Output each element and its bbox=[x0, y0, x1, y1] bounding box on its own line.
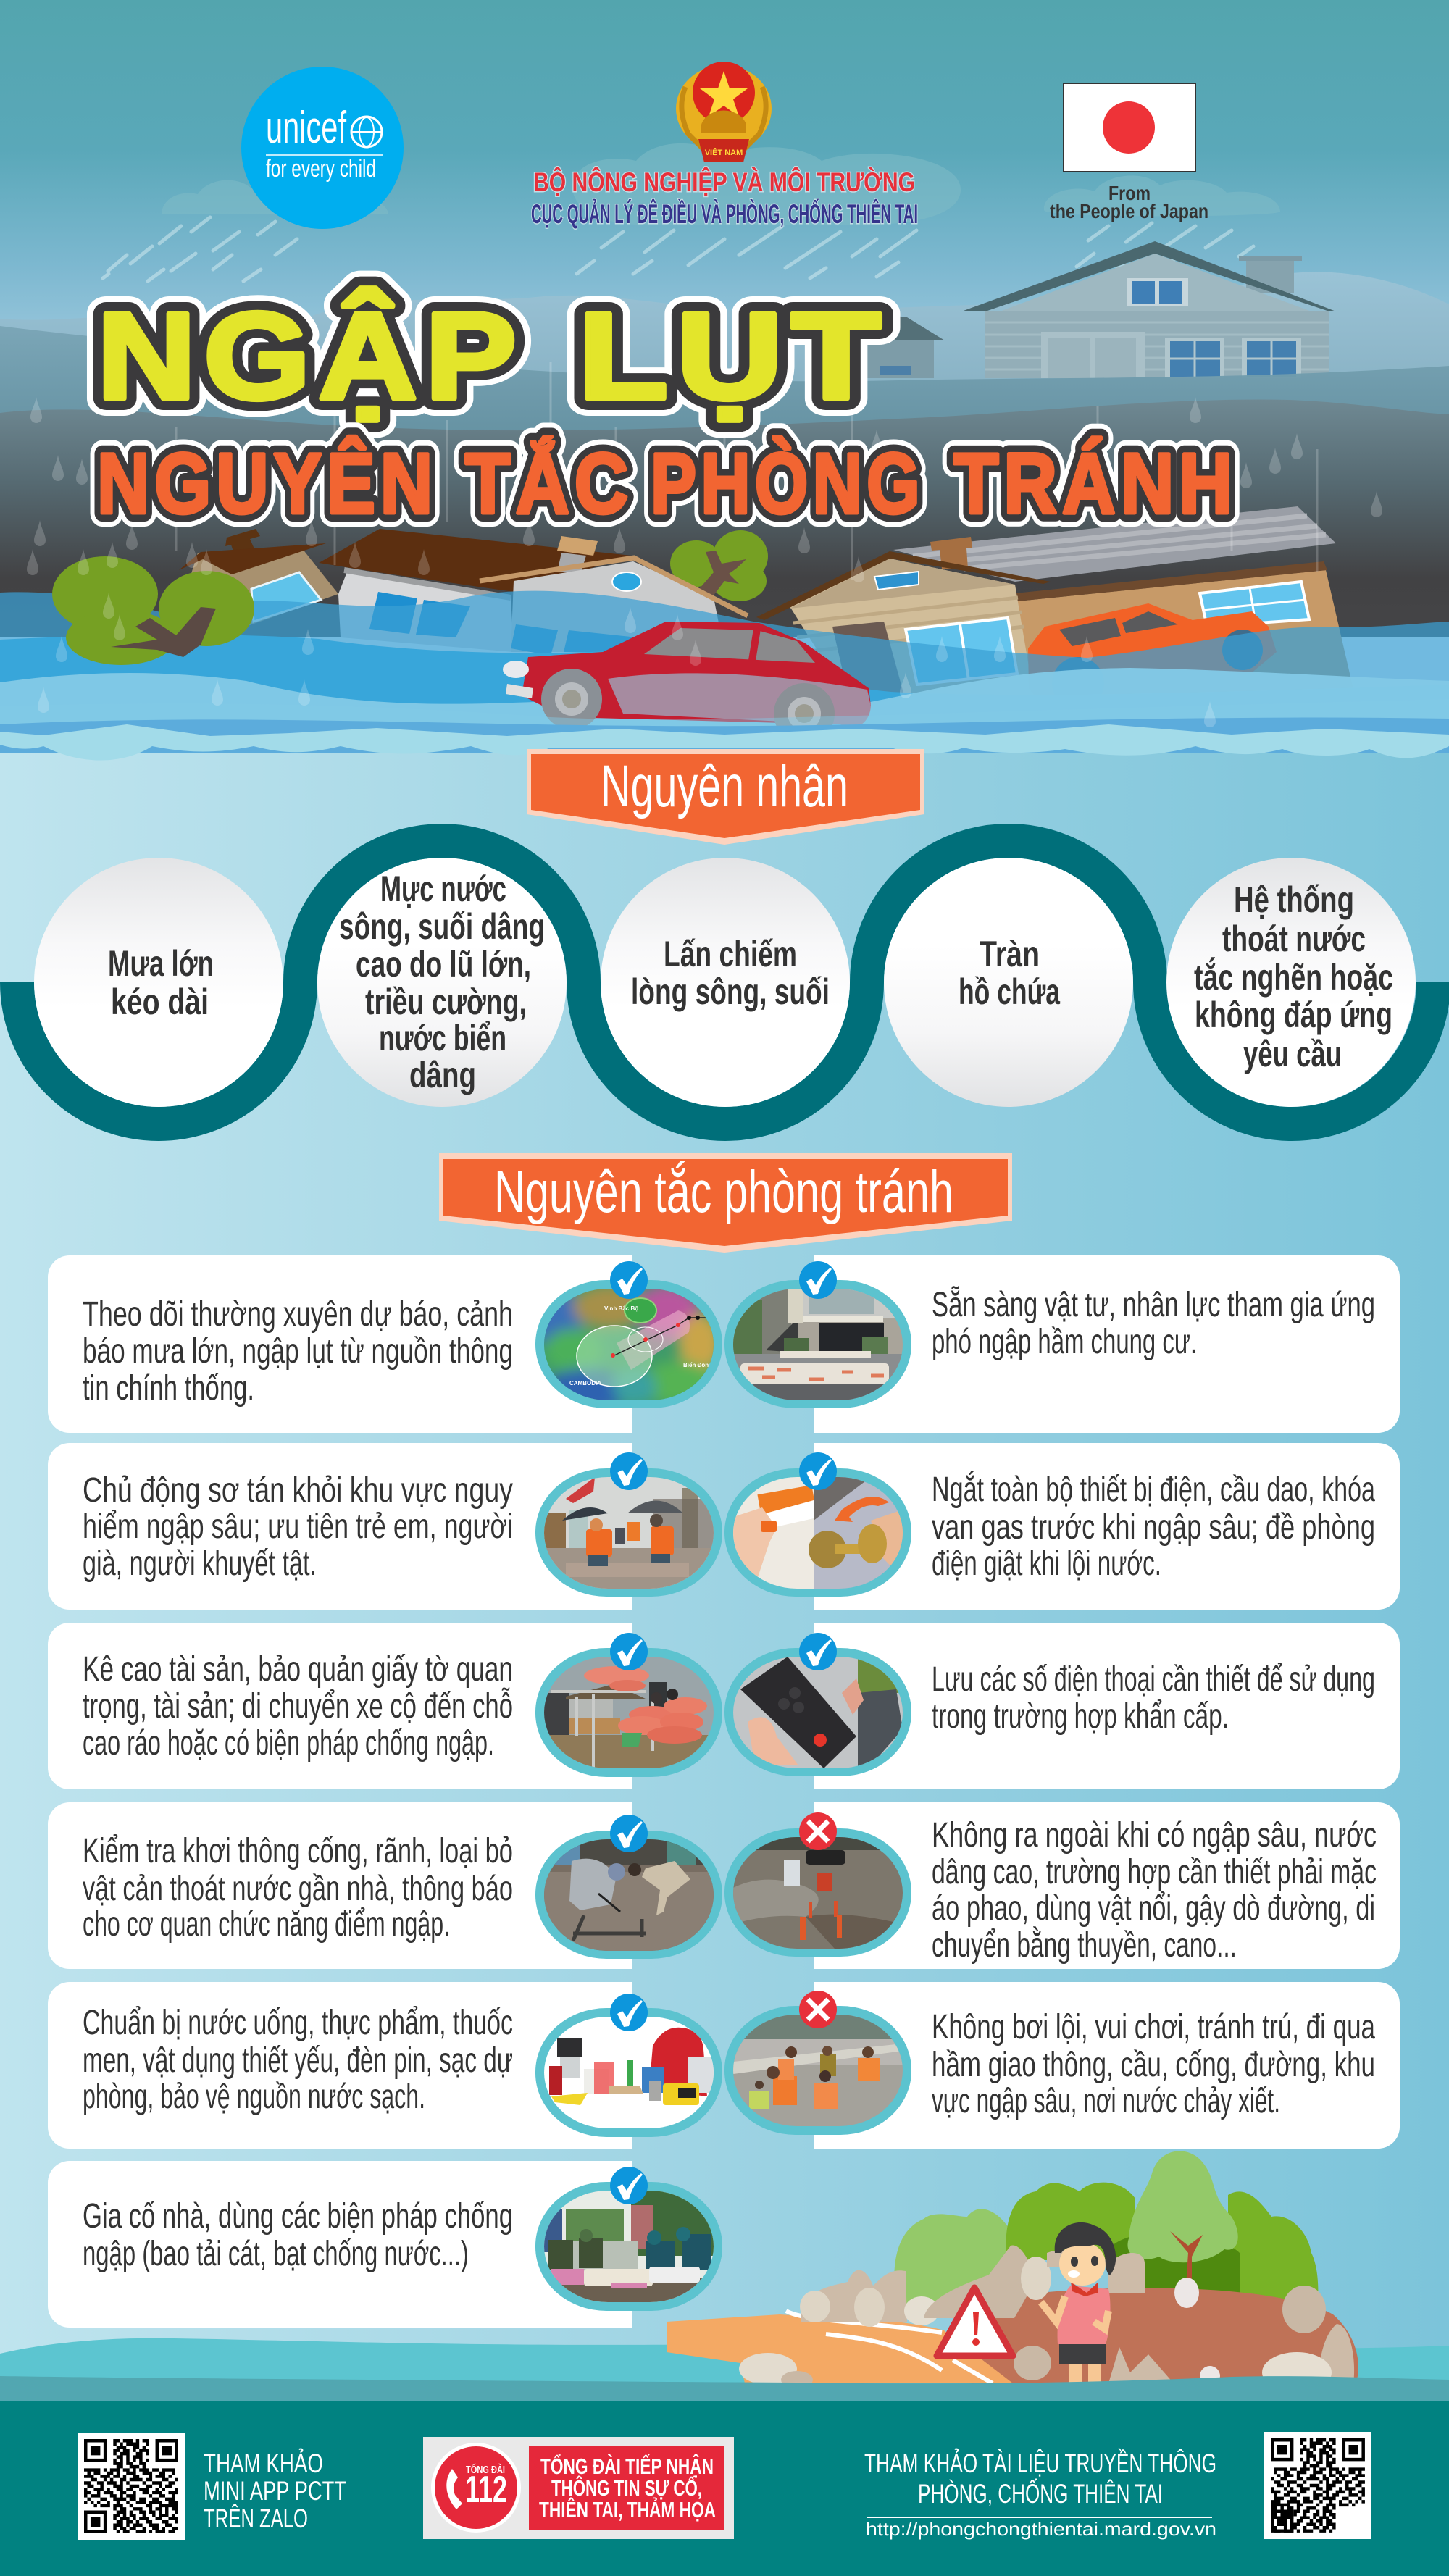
text: right column: vực ngập sâu, nơi nước chảy xiết. bbox=[932, 2082, 1280, 2120]
photo: emergency supplies bbox=[535, 2008, 722, 2137]
title: TẮC bbox=[465, 435, 633, 532]
tan house right bbox=[756, 506, 1355, 710]
text: left column: men, vật dụng thiết yếu, đèn pin, sạc dự bbox=[83, 2041, 513, 2080]
text: left column: hiểm ngập sâu; ưu tiên trẻ em, người bbox=[83, 1507, 513, 1546]
text: left column: tin chính thống. bbox=[83, 1369, 254, 1408]
hotline 112: THIÊN TAI, THẢM HỌA bbox=[539, 2496, 716, 2522]
cause 1: kéo dài bbox=[111, 982, 209, 1022]
photo: raised belongings bbox=[535, 1648, 722, 1777]
text: left column: Theo dõi thường xuyên dự báo, cảnh bbox=[83, 1295, 513, 1334]
cause 2: dâng bbox=[409, 1055, 476, 1095]
hotline 112: TỔNG ĐÀI bbox=[466, 2463, 505, 2476]
text: reference documents: http://phongchongthientai.mard.gov.vn bbox=[866, 2518, 1216, 2540]
title: LỤT bbox=[578, 288, 890, 425]
text: left column: Chuẩn bị nước uống, thực phẩm, thuốc bbox=[83, 2004, 513, 2042]
text: right column: trong trường hợp khẩn cấp. bbox=[932, 1697, 1229, 1736]
photo: reinforcing with sandbags bbox=[535, 2182, 722, 2311]
text: mini app bbox=[204, 2449, 346, 2533]
cause 5 bbox=[1166, 858, 1416, 1107]
bottom dark water bbox=[0, 2376, 1449, 2402]
cause 1: Mưa lớn bbox=[108, 943, 214, 984]
title: NGẬP bbox=[97, 288, 525, 425]
brown ground bbox=[971, 2288, 1358, 2387]
title: PHÒNG bbox=[651, 436, 924, 532]
cause 4 bbox=[884, 858, 1133, 1107]
QR code: mini app bbox=[78, 2433, 185, 2540]
text: mini app: THAM KHẢO bbox=[204, 2449, 323, 2478]
photo: rescue in flooded street bbox=[535, 1468, 722, 1597]
title: PHÒNG bbox=[651, 436, 924, 532]
large tree left bbox=[52, 556, 254, 665]
text: left column: trọng, tài sản; di chuyển xe cộ đến chỗ bbox=[83, 1686, 513, 1726]
text: left column bbox=[83, 1295, 513, 2273]
text: left column: Kê cao tài sản, bảo quản giấy tờ quan bbox=[83, 1650, 513, 1689]
logo: Japan flag: From bbox=[1108, 182, 1151, 204]
brown roof house bbox=[319, 529, 632, 652]
text: left column: phòng, bảo vệ nguồn nước sạch. bbox=[83, 2078, 425, 2116]
rain drops and vertical rain bbox=[27, 362, 1382, 727]
text: right column: chuyển bằng thuyền, cano... bbox=[932, 1925, 1237, 1965]
title: TRÁNH bbox=[953, 436, 1237, 532]
cause 2 bbox=[317, 858, 567, 1107]
QR code: documents bbox=[1264, 2432, 1371, 2539]
panel: right column cards bbox=[814, 1255, 1400, 2149]
panel: left column cards bbox=[48, 1255, 632, 2328]
cause 5: Hệ thống bbox=[1234, 879, 1354, 920]
logo: Japan flag: the People of Japan bbox=[1050, 200, 1208, 222]
cause 2: nước biển bbox=[379, 1018, 506, 1058]
bottom light water bbox=[0, 2338, 1449, 2391]
photo: storm forecast map: CAMBODIA bbox=[569, 1380, 601, 1387]
text: left column: Gia cố nhà, dùng các biện pháp chống bbox=[83, 2197, 513, 2236]
back hills bbox=[0, 272, 1449, 464]
small back house bbox=[848, 310, 945, 378]
cause 2: Mực nước bbox=[380, 869, 506, 909]
hotline 112: 112 bbox=[465, 2469, 507, 2511]
photo: clearing a drain bbox=[535, 1831, 722, 1959]
grey gable house bbox=[480, 536, 748, 656]
text: reference documents: PHÒNG, CHỐNG THIÊN TAI bbox=[918, 2478, 1163, 2509]
photo: children playing in flood bbox=[724, 2006, 911, 2135]
slanted rain streaks bbox=[103, 217, 1253, 281]
photo: switch off breaker and gas valve bbox=[724, 1468, 911, 1597]
title: NGẬP bbox=[97, 288, 525, 425]
cause 4: hồ chứa bbox=[959, 971, 1061, 1012]
red car bbox=[503, 622, 871, 744]
logo: UNICEF bbox=[241, 67, 404, 229]
cause 5: thoát nước bbox=[1222, 919, 1366, 959]
logo: national emblem bbox=[676, 62, 772, 162]
text: reference documents bbox=[864, 2449, 1216, 2540]
heading: Nguyên tắc phòng tránh bbox=[439, 1153, 1012, 1253]
page background bbox=[0, 724, 1449, 2405]
cause 3: lòng sông, suối bbox=[631, 971, 830, 1012]
panel: causes bbox=[17, 840, 1433, 1124]
text: left column: cao ráo hoặc có biện pháp chống ngập. bbox=[83, 1724, 494, 1762]
large grey house bbox=[961, 241, 1336, 378]
clouds bbox=[162, 143, 1280, 225]
warning sign bbox=[937, 2288, 1013, 2356]
hotline 112 bbox=[423, 2437, 734, 2539]
photo: storm forecast map bbox=[526, 1280, 722, 1412]
heading: Nguyên nhân: Nguyên nhân bbox=[601, 753, 848, 819]
footer bbox=[0, 2401, 1449, 2576]
heading: Nguyên nhân bbox=[527, 749, 924, 845]
title bbox=[97, 288, 1237, 532]
logo: Japan flag bbox=[1050, 83, 1208, 222]
logo: UNICEF: for every child bbox=[266, 155, 376, 183]
text: left column: vật cản thoát nước gần nhà, thông báo bbox=[83, 1870, 513, 1908]
cause 3: Lấn chiếm bbox=[664, 934, 797, 974]
text: right column bbox=[932, 1286, 1377, 2120]
hotline 112: TỔNG ĐÀI TIẾP NHẬN bbox=[540, 2453, 714, 2479]
title: NGUYÊN bbox=[97, 435, 438, 532]
text: mini app: TRÊN ZALO bbox=[204, 2504, 308, 2533]
orange car bbox=[1028, 603, 1277, 709]
cause 2: triều cường, bbox=[365, 982, 527, 1022]
title: TẮC bbox=[465, 435, 633, 532]
text: left column: Kiểm tra khơi thông cống, rãnh, loại bỏ bbox=[83, 1832, 513, 1870]
cause 1 bbox=[34, 858, 283, 1107]
illustration: boy on eroded bank bbox=[0, 2151, 1449, 2402]
text: left column: ngập (bao tải cát, bạt chống nước...) bbox=[83, 2235, 469, 2273]
cause 3 bbox=[601, 858, 850, 1107]
agency name: CỤC QUẢN LÝ ĐÊ ĐIỀU VÀ PHÒNG, CHỐNG THIÊN TAI bbox=[531, 198, 918, 229]
text: reference documents: THAM KHẢO TÀI LIỆU TRUYỀN THÔNG bbox=[864, 2449, 1216, 2478]
title: NGUYÊN bbox=[97, 435, 438, 532]
title: LỤT bbox=[578, 288, 890, 425]
title: NGUYÊN bbox=[97, 435, 438, 532]
cause 2: sông, suối dâng bbox=[339, 906, 545, 947]
photo: storm forecast map: Biển Đông bbox=[683, 1362, 712, 1368]
text: right column: điện giật khi lội nước. bbox=[932, 1544, 1161, 1583]
dark storm ground bbox=[0, 400, 1449, 637]
trees bbox=[894, 2151, 1318, 2304]
agency name: BỘ NÔNG NGHIỆP VÀ MÔI TRƯỜNG bbox=[533, 167, 915, 197]
agency name bbox=[531, 167, 918, 229]
small tree centre bbox=[670, 530, 768, 605]
flood water layers bbox=[0, 556, 1449, 761]
title: PHÒNG bbox=[651, 436, 924, 532]
photo: storm forecast map: Vịnh Bắc Bộ bbox=[604, 1305, 638, 1312]
title: NGẬP bbox=[97, 288, 525, 425]
hotline 112: THÔNG TIN SỰ CỐ, bbox=[551, 2475, 702, 2501]
title: TRÁNH bbox=[953, 436, 1237, 532]
mid water band bbox=[0, 326, 1449, 464]
cause 5: yêu cầu bbox=[1243, 1034, 1342, 1074]
title: LỤT bbox=[578, 288, 890, 425]
rocks bbox=[739, 2246, 1354, 2393]
text: right column: phó ngập hầm chung cư. bbox=[932, 1323, 1197, 1361]
tan tilted house bbox=[167, 529, 338, 652]
flooded houses and small tree bbox=[167, 506, 1355, 710]
boy bbox=[1041, 2222, 1116, 2383]
cause 2: cao do lũ lớn, bbox=[356, 944, 531, 984]
photo: sandbags at apartment entrance bbox=[724, 1280, 911, 1408]
text: left column: báo mưa lớn, ngập lụt từ nguồn thông bbox=[83, 1332, 513, 1371]
icon: cross badges bbox=[799, 1812, 837, 2028]
text: left column: già, người khuyết tật. bbox=[83, 1544, 317, 1583]
orange sand bbox=[667, 2314, 1013, 2383]
heading: Nguyên tắc phòng tránh: Nguyên tắc phòng tránh bbox=[494, 1159, 953, 1225]
text: left column: Chủ động sơ tán khỏi khu vực nguy bbox=[83, 1471, 513, 1510]
cause 4: Tràn bbox=[980, 934, 1040, 974]
header illustration: sky and distant house bbox=[0, 0, 1449, 637]
logo: UNICEF: unicef bbox=[266, 103, 347, 153]
photo: phone emergency call bbox=[724, 1648, 911, 1776]
title: TRÁNH bbox=[953, 436, 1237, 532]
icon: check badges bbox=[610, 1261, 837, 2204]
text: left column: cho cơ quan chức năng điểm ngập. bbox=[83, 1905, 450, 1944]
photo: motorbike in deep flood bbox=[724, 1828, 911, 1957]
logo: national emblem: VIỆT NAM bbox=[705, 148, 743, 157]
title: TẮC bbox=[465, 435, 633, 532]
text: mini app: MINI APP PCTT bbox=[204, 2476, 346, 2506]
